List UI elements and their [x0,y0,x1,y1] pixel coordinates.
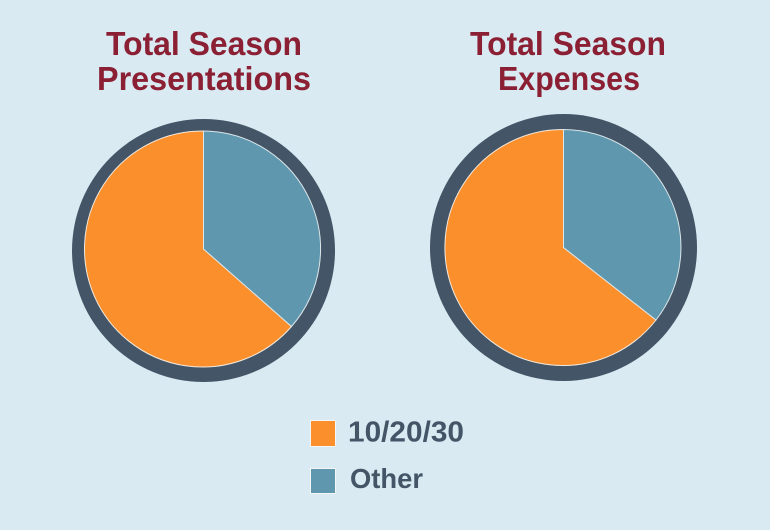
legend [310,416,464,494]
heading: total season presentations [97,25,311,97]
heading: total season presentations: Presentations [97,60,311,97]
pie slice: other expenses [564,130,681,320]
legend label: 10/20/30: 10/20/30 [348,416,464,448]
legend swatch: other [310,468,336,494]
heading: total season expenses: Total Season [470,25,666,62]
legend label: other: Other [350,463,423,494]
heading: total season presentations: Total Season [106,25,302,62]
pie ring: expenses [430,114,697,381]
heading: total season expenses [470,25,666,97]
heading: total season expenses: Expenses [498,60,640,97]
pie chart: expenses [430,114,697,381]
pie slice: 10/20/30 presentations [85,131,292,367]
pie chart: presentations [72,119,335,382]
pie slice: 10/20/30 expenses [445,129,656,365]
pie slice: other presentations [204,131,321,326]
legend swatch: 10/20/30 [310,420,336,446]
pie ring: presentations [72,119,335,382]
